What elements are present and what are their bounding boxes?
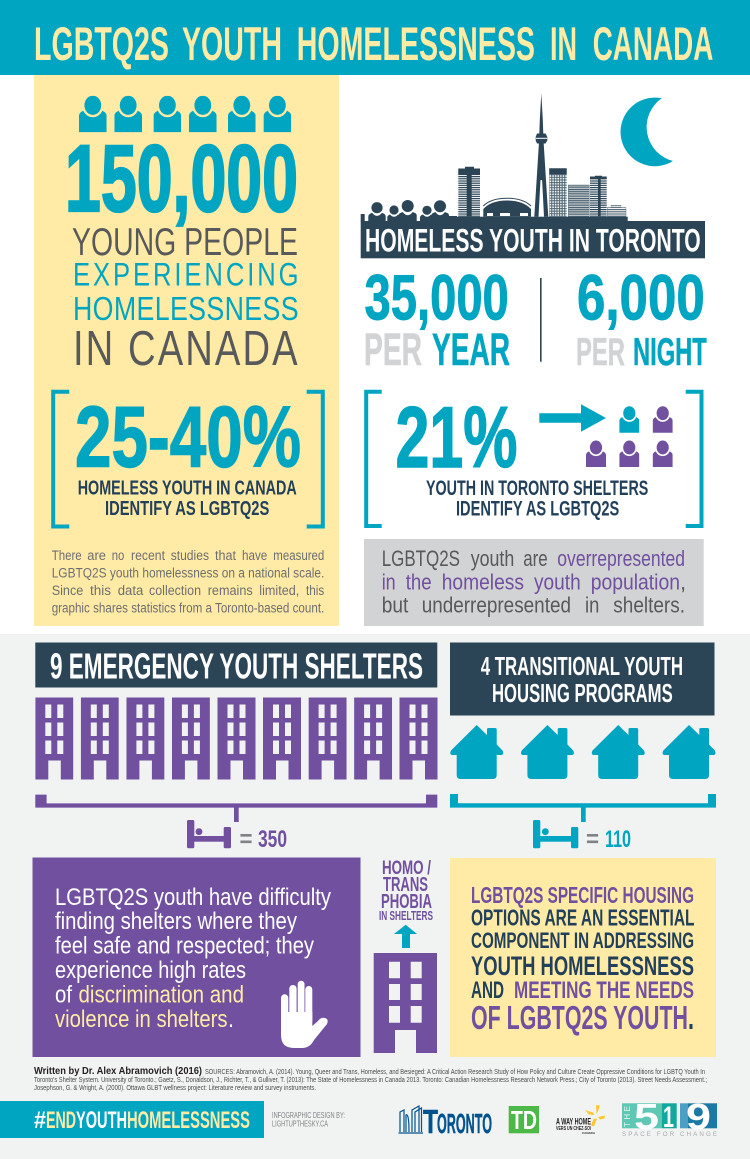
text: young people experiencing homelessness in Canada: EXPERIENCING [73, 258, 299, 293]
hashtag banner [0, 1101, 264, 1138]
text: ORONTO [437, 1108, 492, 1139]
statistic: 6,000 per night: PER [576, 331, 625, 374]
logo: A Way Home: CANADA [582, 1131, 596, 1135]
credits and sources: Written by Dr. Alex Abramovich (2016) [34, 1066, 202, 1077]
icon: raised hand [281, 981, 328, 1048]
icon: bed, teal [533, 820, 578, 848]
label: homo / transphobia in shelters: TRANS [383, 874, 428, 896]
building five [607, 205, 626, 217]
label: homo / transphobia in shelters: IN SHELTERS [379, 908, 433, 923]
statistic 21%: 21% [396, 390, 518, 486]
logo: The 519: 9 [686, 1096, 711, 1137]
text: data note: this [306, 583, 325, 598]
building three [568, 185, 589, 217]
logo: The 519: THE [623, 1106, 632, 1127]
label: 350 beds: = [240, 826, 252, 853]
statistic: 35,000 per year [364, 262, 510, 375]
domed stadium [483, 198, 531, 217]
hashtag banner: END [46, 1107, 76, 1134]
label: homo / transphobia in shelters: HOMO / [382, 857, 431, 879]
panel text: LGBTQ2S youth have difficulty [55, 884, 332, 911]
icon: shelter building [374, 953, 437, 1053]
logo: The 519: 1 [663, 1101, 674, 1134]
panel text: violence in shelters [55, 1006, 228, 1033]
callout: overrepresented: youth [471, 546, 514, 571]
arrow up [394, 925, 417, 948]
text: data note: collection [149, 583, 201, 598]
label: 110 beds [586, 826, 631, 853]
panel text: discrimination and [78, 982, 244, 1008]
credits and sources: Josephson, G. & Wright, A. (2000). Ottawa GLBT wellness project: Literature review and survey instruments. [34, 1083, 316, 1092]
text: data note: limited, [259, 583, 299, 598]
text: data note: are [87, 548, 106, 563]
logo: City of Toronto [398, 1103, 492, 1140]
skyline ledge [455, 217, 628, 222]
panel text [471, 882, 694, 1036]
logo: A Way Home: VERS UN CHEZ-SOI [556, 1126, 591, 1132]
building two [549, 168, 567, 217]
callout: overrepresented: underrepresented [422, 593, 571, 618]
callout: overrepresented: in [382, 569, 396, 594]
divider [540, 278, 542, 362]
statistic 25-40%: 25-40% [75, 390, 301, 486]
callout: overrepresented: are [523, 546, 548, 571]
statistic: 35,000 per year: YEAR [432, 324, 510, 375]
CN Tower [534, 93, 548, 217]
text: data note: no [112, 548, 124, 563]
panel text: . [688, 999, 694, 1036]
title banner: LGBTQ2S [34, 17, 169, 70]
callout: overrepresented: the [406, 569, 432, 594]
callout: overrepresented: overrepresented [557, 546, 685, 571]
statistic: 6,000 per night [576, 262, 707, 374]
text: data note: that [215, 548, 236, 563]
callout: overrepresented [364, 539, 704, 626]
statistic caption: IDENTIFY AS LGBTQ2S [456, 498, 619, 521]
text: data note [52, 548, 325, 615]
icon: five people, one highlighted [586, 406, 673, 467]
title banner [0, 0, 750, 75]
text: data note: measured [273, 548, 324, 563]
text: data note: graphic shares statistics from a Toronto-based count. [52, 600, 324, 615]
heading: 4 transitional youth housing programs [450, 642, 714, 716]
statistic caption: YOUTH IN TORONTO SHELTERS [426, 477, 648, 500]
text: young people experiencing homelessness in Canada: YOUNG PEOPLE [72, 221, 298, 264]
text: data note: this [90, 583, 111, 598]
bracket: Toronto shelter statistic [366, 392, 702, 526]
panel text: feel safe and respected; they [55, 932, 315, 960]
statistic: 35,000 per year: 35,000 [364, 262, 509, 334]
design credit: INFOGRAPHIC DESIGN BY: [272, 1110, 345, 1120]
label: 110 beds: 110 [605, 826, 631, 853]
callout: overrepresented: , [680, 569, 686, 594]
lower section background [0, 634, 750, 1159]
heading: 9 emergency youth shelters [35, 642, 437, 688]
panel text: . [228, 1006, 234, 1033]
logo: A Way Home [556, 1105, 605, 1135]
heading: 9 emergency youth shelters: 9 EMERGENCY YOUTH SHELTERS [50, 646, 423, 686]
building one [458, 167, 480, 217]
group of silhouetted youth [361, 200, 457, 222]
icon row: nine shelter buildings [35, 698, 438, 780]
callout: overrepresented: shelters. [613, 593, 685, 618]
statistic caption [78, 476, 297, 520]
bracket: housing total [450, 794, 716, 822]
label: 110 beds: = [586, 826, 599, 853]
credits and sources [34, 1066, 707, 1092]
text: data note: data [118, 583, 144, 598]
title banner: HOMELESSNESS [297, 17, 535, 70]
design credit: LIGHTUPTHESKY.CA [272, 1118, 328, 1128]
text: data note: LGBTQ2S youth homelessness on a national scale. [52, 566, 324, 581]
building four [590, 176, 607, 217]
text: data note: recent [131, 548, 165, 563]
text: data note: studies [171, 548, 209, 563]
panel text: finding shelters where they [55, 908, 298, 935]
logo: TD: TD [511, 1105, 537, 1135]
callout: overrepresented: LGBTQ2S [382, 546, 460, 571]
text: young people experiencing homelessness in Canada: IN CANADA [73, 322, 298, 376]
hashtag banner: # [34, 1107, 46, 1134]
callout: overrepresented: but [382, 593, 408, 618]
statistic caption: IDENTIFY AS LGBTQ2S [105, 497, 269, 520]
icon: bed, purple [187, 820, 231, 848]
bracket: shelter total [35, 795, 437, 822]
hashtag banner: YOUTH [76, 1107, 127, 1134]
callout: overrepresented: youth [534, 569, 581, 594]
panel text: of [55, 982, 72, 1008]
statistic caption: HOMELESS YOUTH IN CANADA [78, 476, 297, 499]
arrow to people [539, 404, 606, 432]
logo: A Way Home: A WAY HOME [556, 1116, 591, 1126]
big number 150,000: 150,000 [65, 126, 298, 232]
panel: discrimination in shelters [32, 858, 360, 1057]
text: data note: There [52, 548, 82, 563]
title banner: YOUTH [182, 17, 282, 70]
text: data note: have [242, 548, 267, 563]
label: homo / transphobia in shelters [379, 857, 433, 923]
logo: City of Toronto: T [423, 1103, 438, 1140]
statistic: 35,000 per year: PER [364, 324, 422, 375]
text: data note: Since [52, 583, 83, 598]
hashtag banner: HOMELESSNESS [127, 1107, 250, 1134]
text: data note: remains [208, 583, 253, 598]
icon: crescent moon [621, 98, 673, 166]
panel text: AND [471, 977, 504, 1004]
panel text: experience high rates [55, 957, 246, 984]
logo: The 519 [622, 1096, 717, 1138]
icon: six people [79, 96, 291, 132]
statistic caption [426, 477, 648, 521]
panel text [55, 884, 332, 1033]
bracket: left statistic [53, 392, 323, 526]
callout: overrepresented: population [591, 569, 680, 594]
text: young people experiencing homelessness in Canada: HOMELESSNESS [73, 291, 299, 328]
design credit [272, 1110, 345, 1128]
logo: The 519: SPACE FOR CHANGE [622, 1131, 717, 1138]
text: young people experiencing homelessness in Canada [72, 221, 299, 376]
title banner: IN [550, 17, 577, 70]
icon row: four houses [450, 725, 716, 779]
callout: overrepresented: homeless [442, 569, 524, 594]
panel: housing options call to action [450, 858, 716, 1057]
logo: The 519: 5 [634, 1096, 659, 1137]
illustration: Toronto skyline [361, 93, 628, 222]
callout: overrepresented: in [585, 593, 599, 618]
label: 350 beds: 350 [258, 826, 287, 853]
panel: national statistics [34, 75, 339, 626]
label: 350 beds [240, 826, 287, 853]
statistic: 6,000 per night: 6,000 [577, 262, 705, 334]
label: homo / transphobia in shelters: PHOBIA [381, 891, 432, 913]
